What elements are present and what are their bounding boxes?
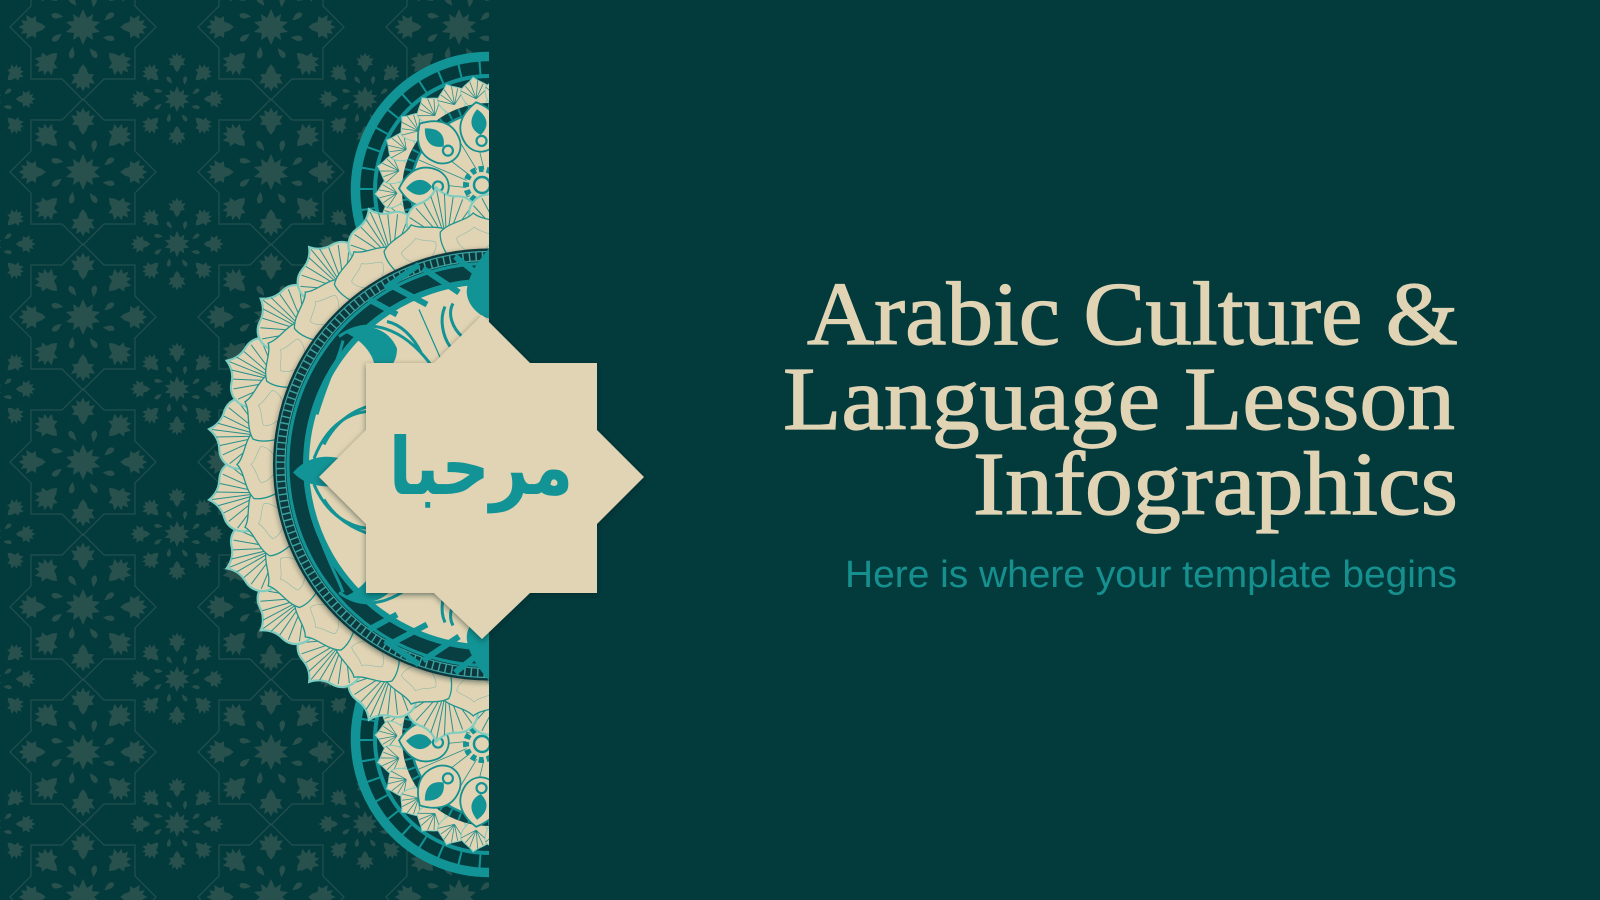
title [783, 265, 1458, 534]
arabic greeting: مرحبا [389, 422, 573, 513]
star shape [319, 315, 644, 639]
teal straps across ring [369, 256, 483, 672]
mandala: top small half [356, 56, 622, 324]
subtitle: Here is where your template begins [845, 554, 1457, 596]
inner petal ring [236, 211, 512, 718]
mandala: main half [205, 181, 705, 748]
title line 2: Language Lesson [783, 350, 1455, 449]
title line 1: Arabic Culture & [807, 265, 1458, 364]
eight-point star badge [319, 315, 644, 639]
teal leaf motifs [293, 248, 489, 680]
decorative arabesque pattern [0, 0, 489, 900]
title line 3: Infographics [973, 435, 1458, 534]
right solid panel [489, 0, 1600, 900]
outer petal ring [205, 181, 542, 748]
mandala: bottom small half [356, 606, 622, 872]
ring bands [273, 248, 705, 680]
